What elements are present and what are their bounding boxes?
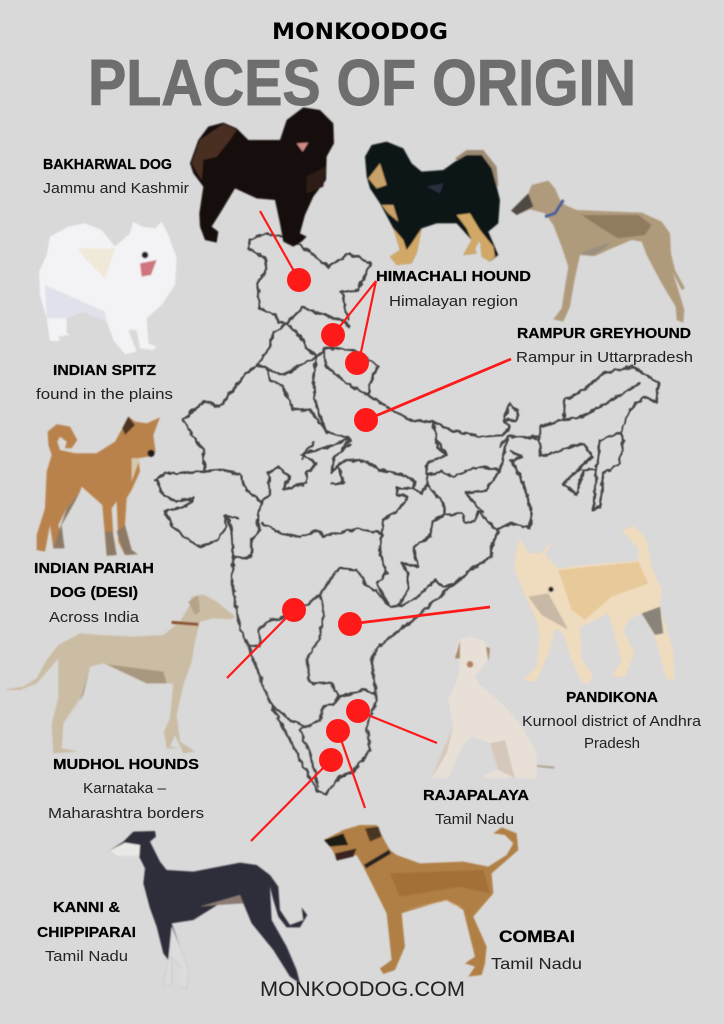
title: PLACES OF ORIGIN <box>88 46 636 119</box>
label: Pandikona: Pradesh <box>584 735 640 752</box>
dog: Combai <box>324 825 518 977</box>
label: Himachali Hound <box>376 268 531 310</box>
dog: Bakharwal <box>190 107 334 247</box>
label: Kanni and Chippiparai <box>37 899 136 965</box>
label: Rajapalaya <box>423 787 529 828</box>
label: Rajapalaya: Tamil Nadu <box>435 811 514 828</box>
label: Pandikona <box>522 689 702 752</box>
label: Rampur Greyhound: RAMPUR GREYHOUND <box>517 325 691 342</box>
label: Rampur Greyhound: Rampur in Uttarpradesh <box>516 349 693 366</box>
label: Indian Spitz <box>36 362 173 403</box>
dog: Kanni <box>109 831 307 988</box>
label: Rampur Greyhound <box>516 325 693 366</box>
label: Combai: COMBAI <box>499 927 575 946</box>
label: Indian Pariah Dog: DOG (DESI) <box>50 584 138 601</box>
dog: Mudhol hound <box>7 594 235 753</box>
location markers <box>282 268 378 772</box>
label: Bakharwal Dog <box>43 156 189 197</box>
label: Indian Spitz: INDIAN SPITZ <box>53 362 156 379</box>
label: Indian Pariah Dog: Across India <box>49 609 140 626</box>
label: Rajapalaya: RAJAPALAYA <box>423 787 529 804</box>
dog: Rajapalaya <box>432 637 554 778</box>
label: Himachali Hound: Himalayan region <box>389 293 518 310</box>
label: Mudhol Hounds: Karnataka – <box>83 780 167 797</box>
label: Himachali Hound: HIMACHALI HOUND <box>376 268 531 285</box>
dog: Indian Spitz <box>39 222 177 354</box>
dog: Indian Pariah <box>37 417 160 556</box>
label: Mudhol Hounds: MUDHOL HOUNDS <box>53 756 199 773</box>
label: Kanni and Chippiparai: CHIPPIPARAI <box>37 924 136 941</box>
website footer: MONKOODOG.COM <box>260 978 465 1001</box>
label: Pandikona: PANDIKONA <box>566 689 658 706</box>
label: Indian Pariah Dog <box>34 560 154 626</box>
label: Mudhol Hounds <box>48 756 204 822</box>
label: Combai <box>491 927 582 973</box>
label: Pandikona: Kurnool district of Andhra <box>522 713 702 730</box>
label: Combai: Tamil Nadu <box>491 956 582 973</box>
logo: MONKOODOG <box>272 20 448 45</box>
label: Indian Spitz: found in the plains <box>36 386 173 403</box>
label: Bakharwal Dog: Jammu and Kashmir <box>43 180 189 197</box>
label: Kanni and Chippiparai: KANNI & <box>53 899 120 916</box>
label: Indian Pariah Dog: INDIAN PARIAH <box>34 560 154 577</box>
red connector lines <box>227 211 511 841</box>
label: Kanni and Chippiparai: Tamil Nadu <box>45 948 128 965</box>
label: Mudhol Hounds: Maharashtra borders <box>48 805 204 822</box>
dog: Pandikona <box>515 526 674 684</box>
dog: Himachali mastiff <box>365 142 500 265</box>
dog: Rampur greyhound <box>511 181 685 323</box>
label: Bakharwal Dog: BAKHARWAL DOG <box>43 156 172 173</box>
map of India <box>156 233 658 795</box>
